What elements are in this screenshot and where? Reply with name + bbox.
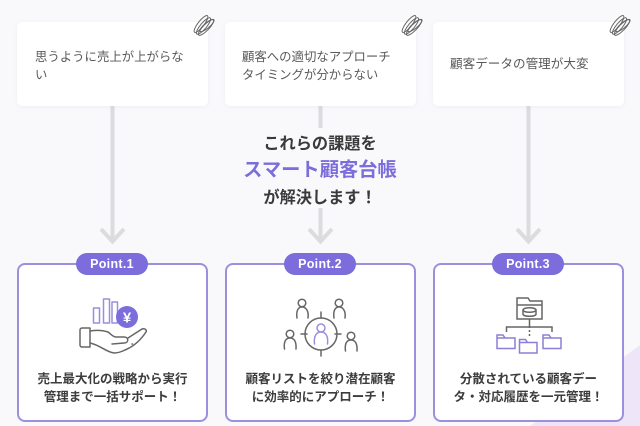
- point text 3: 分散されている顧客デー: [460, 372, 597, 386]
- icon: database to folders: [496, 297, 562, 354]
- problem card 2: [225, 22, 416, 106]
- point text 1: 管理まで一括サポート！: [44, 390, 181, 404]
- point card 2: [225, 263, 416, 422]
- point text 1: 売上最大化の戦略から実行: [37, 372, 188, 386]
- problem card 1: [17, 22, 208, 106]
- problem text 3: 顧客データの管理が大変: [450, 57, 589, 71]
- point text 3: タ・対応履歴を一元管理！: [453, 390, 604, 404]
- problem card 3: [433, 22, 624, 106]
- problem text 1: い: [35, 68, 47, 82]
- icon: spring clip 2: [402, 15, 423, 36]
- point card 3: [433, 263, 624, 422]
- badge: Point.3: [492, 253, 564, 275]
- central text backing: [240, 128, 402, 208]
- problem text 1: 思うように売上が上がらな: [35, 50, 184, 64]
- problem text 1: [35, 50, 184, 82]
- icon: spring clip 1: [194, 15, 215, 36]
- badge: Point.2: Point.2: [298, 257, 342, 271]
- point text 3: [453, 372, 604, 404]
- point text 1: [37, 372, 188, 404]
- central message line 1: これらの課題を: [263, 135, 377, 153]
- icon: hand with chart and yen: ¥: [123, 310, 132, 326]
- problem text 2: [242, 50, 391, 82]
- point card 1: [17, 263, 208, 422]
- central message line 3: が解決します！: [263, 189, 377, 207]
- icon: target customer: [284, 298, 358, 357]
- badge: Point.3: Point.3: [506, 257, 550, 271]
- problem text 2: タイミングが分からない: [242, 68, 378, 82]
- icon: hand with chart and yen: [79, 298, 147, 354]
- point text 2: に効率的にアプローチ！: [252, 390, 389, 404]
- badge: Point.1: Point.1: [90, 257, 134, 271]
- point text 2: [245, 372, 396, 404]
- central message highlight: スマート顧客台帳: [243, 160, 397, 181]
- badge: Point.2: [284, 253, 356, 275]
- badge: Point.1: [76, 253, 148, 275]
- point text 2: 顧客リストを絞り潜在顧客: [245, 372, 396, 386]
- icon: spring clip 3: [610, 15, 631, 36]
- problem text 2: 顧客への適切なアプローチ: [242, 50, 391, 64]
